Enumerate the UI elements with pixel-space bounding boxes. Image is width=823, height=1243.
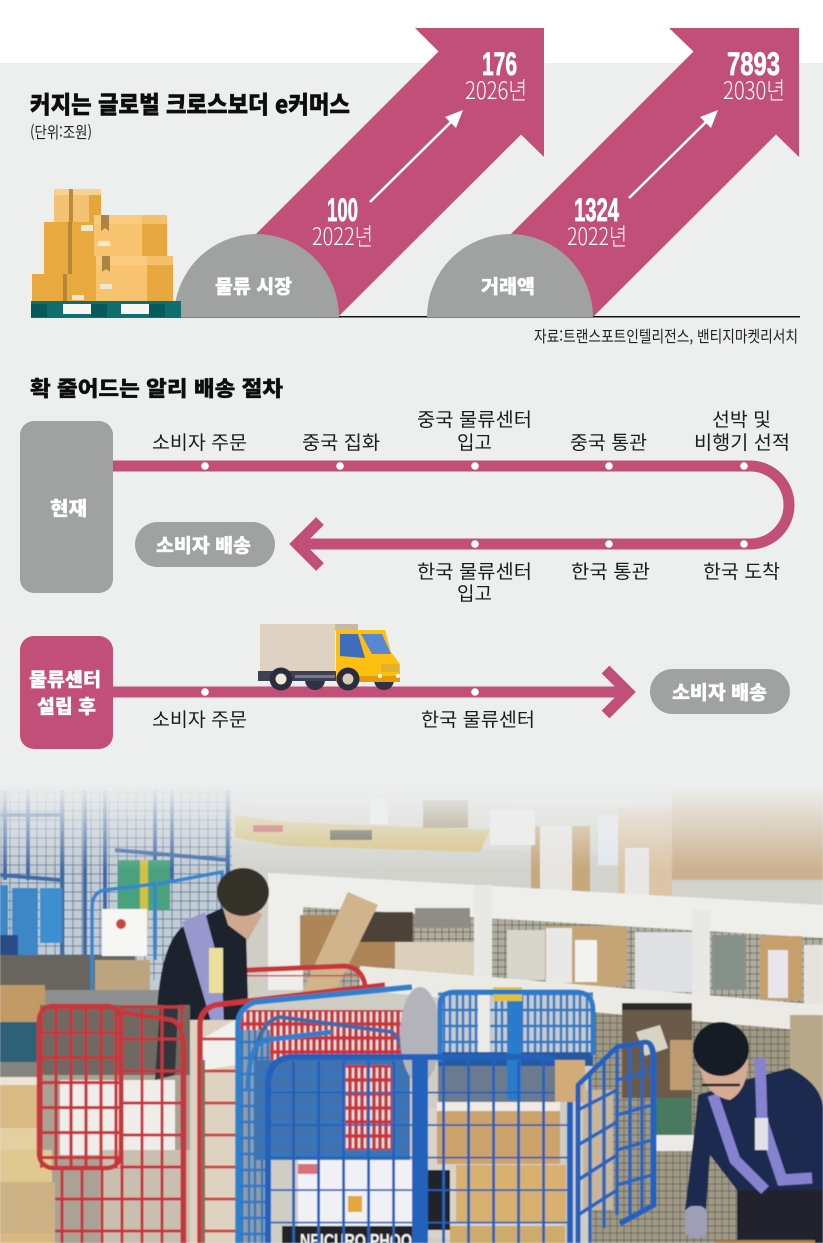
- floor and pallet: [232, 785, 823, 875]
- arrow: growth logistics: [370, 110, 463, 202]
- right blue cart wing: [555, 1060, 585, 1102]
- photo: warehouse workers sorting parcels: [0, 785, 823, 1243]
- route labels: China steps: 비행기 선적: [694, 428, 790, 455]
- arrow: growth transaction: [629, 110, 718, 198]
- front blue cart: [270, 1061, 570, 1243]
- value: 100 in 2022: 2022년: [312, 217, 373, 252]
- shelf boxes: [300, 915, 413, 967]
- route labels: China steps: 입고: [457, 428, 492, 455]
- title: 커지는 글로벌 크로스보더 e커머스: [30, 85, 350, 120]
- baseline: [180, 316, 800, 318]
- pill: consumer delivery after: [650, 669, 790, 714]
- dome: transaction value: 거래액: [481, 272, 535, 299]
- route labels: after center: [152, 705, 535, 732]
- pill: consumer delivery current: [135, 522, 275, 567]
- top boxes: [531, 826, 590, 893]
- photo top fade: [0, 780, 823, 870]
- route labels: after center: 한국 물류센터: [421, 705, 535, 732]
- dome: logistics market: 물류 시장: [215, 272, 293, 299]
- interior of red cart: [40, 1005, 190, 1243]
- value: 176 in 2026: 2026년: [465, 71, 527, 106]
- back wall with cages: [0, 790, 235, 1025]
- route labels: after center: 소비자 주문: [152, 705, 247, 732]
- value: 7893 in 2030: [723, 46, 785, 106]
- upper shelf: [268, 873, 823, 938]
- pill: consumer delivery current: 소비자 배송: [156, 531, 251, 558]
- dome: transaction value: [427, 234, 593, 317]
- value: 7893 in 2030: 2030년: [723, 71, 785, 106]
- value: 7893 in 2030: 7893: [727, 46, 780, 82]
- section heading: 확 줄어드는 알리 배송 절차: [30, 373, 283, 403]
- back blue cart: [438, 992, 593, 1062]
- red cart left: [40, 1008, 120, 1168]
- box: current: [20, 421, 113, 593]
- box: after logistics center: [20, 636, 113, 749]
- route labels: China steps: 소비자 주문: [152, 428, 247, 455]
- value: 100 in 2022: [312, 192, 373, 252]
- arrow: logistics market: [256, 28, 544, 317]
- route labels: Korea steps: 한국 도착: [703, 557, 780, 584]
- route labels: China steps: [152, 405, 790, 455]
- light blue cart: [240, 1010, 415, 1070]
- value: 1324 in 2022: 2022년: [567, 217, 627, 252]
- box: after logistics center: 설립 후: [37, 692, 96, 719]
- after-center route line with arrow: [110, 670, 628, 714]
- red cart centre: [190, 1020, 238, 1243]
- dome: logistics market: [174, 234, 339, 317]
- value: 176 in 2026: [465, 46, 527, 106]
- icon: delivery truck: [258, 624, 400, 690]
- pill: consumer delivery after: 소비자 배송: [672, 678, 767, 705]
- value: 100 in 2022: 100: [327, 192, 358, 228]
- box: after logistics center: 물류센터: [29, 665, 101, 692]
- route labels: China steps: 중국 집화: [302, 428, 380, 455]
- lower shelf: [360, 966, 823, 1035]
- left stacked boxes: [0, 1085, 38, 1145]
- long diagonal box: [302, 892, 378, 992]
- route labels: Korea steps: 입고: [457, 579, 492, 606]
- route labels: China steps: 중국 통관: [570, 428, 647, 455]
- route labels: Korea steps: 한국 통관: [571, 557, 650, 584]
- unit note: (단위:조원): [30, 119, 92, 143]
- arrow: transaction value: [511, 28, 799, 317]
- worker one: [156, 908, 248, 1080]
- value: 176 in 2026: 176: [482, 46, 517, 82]
- boxes inside front cart: [428, 1108, 560, 1238]
- box: current: 현재: [50, 494, 87, 521]
- current route line with arrow: [110, 462, 789, 567]
- icon: stacked cardboard boxes on pallet: [31, 189, 181, 318]
- value: 1324 in 2022: 1324: [574, 192, 619, 228]
- route labels: Korea steps: [417, 557, 780, 606]
- area under shelf: [268, 905, 823, 1020]
- worker two: [685, 1068, 823, 1243]
- route labels: China steps: 선박 및: [712, 405, 771, 432]
- rear red cart: [230, 966, 365, 1005]
- route labels: China steps: 중국 물류센터: [417, 405, 532, 432]
- value: 1324 in 2022: [567, 192, 627, 252]
- route labels: Korea steps: 한국 물류센터: [417, 557, 532, 584]
